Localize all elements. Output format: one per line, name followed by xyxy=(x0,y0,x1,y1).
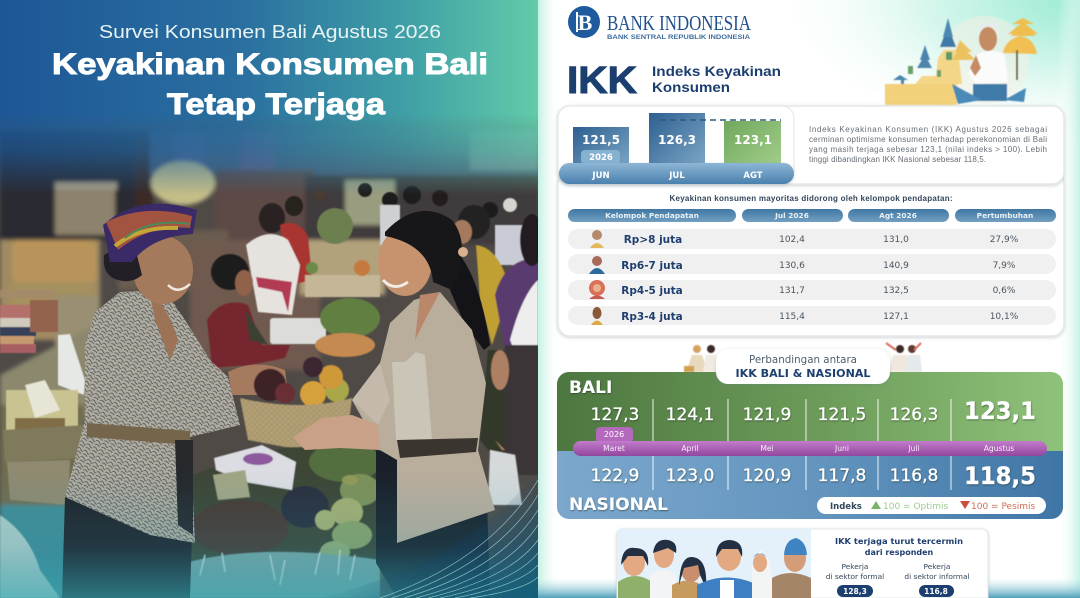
dividers xyxy=(653,399,951,490)
month pill xyxy=(559,163,794,184)
bottom-right corner overlay xyxy=(341,489,538,598)
text block: IKK description: tinggi dibandingkan IKK Nasional sebesar 118,5. xyxy=(809,155,986,164)
comparison title pill xyxy=(716,349,890,384)
national values: 123,0 xyxy=(666,466,714,486)
illustration: respondents xyxy=(617,529,811,598)
woman with headscarf xyxy=(62,204,287,598)
top gradient overlay xyxy=(0,0,538,195)
IKK heading: Indeks Keyakinan xyxy=(652,64,781,79)
bar: Juni: 2026 xyxy=(589,153,613,163)
panel: income table card xyxy=(558,172,1064,336)
panel: respondent card xyxy=(617,529,988,598)
panel: IKK summary card xyxy=(558,106,1064,184)
Bank Indonesia logo: B xyxy=(578,10,593,35)
table row: Rp6-7 juta: 130,6 xyxy=(779,261,805,271)
table header: Kelompok Pendapatan xyxy=(605,211,699,220)
month bar xyxy=(573,441,1047,456)
text block: IKK description: yang masih terjaga sebesar 123,1 (nilai indeks > 100). Lebih xyxy=(809,145,1047,154)
month bar: Agustus xyxy=(984,444,1014,453)
IKK heading xyxy=(567,60,781,102)
text block: IKK description: cerminan optimisme konsumen terhadap perekonomian di Bali xyxy=(809,135,1047,144)
table row: Rp3-4 juta: 10,1% xyxy=(990,312,1019,322)
month bar: April xyxy=(681,444,699,453)
table row: Rp>8 juta: 131,0 xyxy=(883,235,909,245)
panel: Bali vs national comparison xyxy=(557,372,1063,519)
table row: Rp4-5 juta: 132,5 xyxy=(883,286,909,296)
comparison title pill: Perbandingan antara xyxy=(749,354,857,366)
table row: Rp4-5 juta xyxy=(568,280,1056,300)
table row: Rp>8 juta: 102,4 xyxy=(779,235,805,245)
2026 tag: 2026 xyxy=(604,430,624,439)
bar: Juli xyxy=(649,113,705,170)
main title: Tetap Terjaga xyxy=(167,88,385,121)
Bali values: 126,3 xyxy=(890,405,938,425)
crowd heads xyxy=(382,192,398,208)
national values xyxy=(591,462,1036,490)
table row: Rp6-7 juta xyxy=(568,254,1056,274)
Bank Indonesia logo: BANK INDONESIA xyxy=(607,11,751,35)
market background xyxy=(0,130,540,598)
table header: Agt 2026 xyxy=(879,211,917,220)
vegetables and fruit stall xyxy=(0,442,381,598)
main title: Keyakinan Konsumen Bali xyxy=(52,48,488,81)
main title xyxy=(52,48,488,121)
respondent text: 116,8 xyxy=(924,587,948,596)
respondent text: dari responden xyxy=(865,548,934,557)
table header: Jul 2026 xyxy=(774,211,809,220)
Bali values: 127,3 xyxy=(591,405,639,425)
table header xyxy=(568,209,1056,222)
Bank Indonesia logo xyxy=(568,6,751,41)
month bar: Mei xyxy=(760,444,774,453)
table row: Rp4-5 juta: 0,6% xyxy=(993,286,1016,296)
national values: 122,9 xyxy=(591,466,639,486)
month bar: Maret xyxy=(603,444,625,453)
respondent text: 128,3 xyxy=(843,587,867,596)
national values: 120,9 xyxy=(743,466,791,486)
bar: Juni: 121,5 xyxy=(582,133,620,147)
table row: Rp3-4 juta: Rp3-4 juta xyxy=(621,311,683,323)
respondent text: IKK terjaga turut tercermin xyxy=(835,537,963,546)
background shoppers xyxy=(207,183,544,505)
respondent text: di sektor formal xyxy=(826,572,884,581)
smiling young woman xyxy=(293,211,495,598)
table row: Rp3-4 juta xyxy=(568,306,1056,325)
national values: 117,8 xyxy=(818,466,866,486)
table header: Pertumbuhan xyxy=(977,211,1033,220)
bar: Agustus xyxy=(724,121,781,170)
month pill: JUL xyxy=(668,171,685,181)
2026 tag xyxy=(596,427,633,443)
icon: Balinese man and temple xyxy=(885,16,1038,105)
table heading: Keyakinan konsumen mayoritas didorong oleh kelompok pendapatan: xyxy=(670,194,952,203)
icon: students left xyxy=(684,345,716,372)
market photo panel xyxy=(0,0,544,598)
Bali values: 124,1 xyxy=(666,405,714,425)
month bar: Juli xyxy=(907,444,920,453)
table row: Rp6-7 juta: 7,9% xyxy=(993,261,1016,271)
table row: Rp6-7 juta: 140,9 xyxy=(883,261,909,271)
table row: Rp4-5 juta: Rp4-5 juta xyxy=(621,285,683,297)
label: Bali: BALI xyxy=(569,378,612,398)
legend: Indeks xyxy=(830,502,862,512)
bar: Juni xyxy=(573,127,629,170)
text block: IKK description xyxy=(809,125,1047,164)
legend: 100 = Pesimis xyxy=(971,502,1036,512)
fabric pile xyxy=(0,290,85,505)
national values: 116,8 xyxy=(890,466,938,486)
panel: monthly bar chart xyxy=(558,106,794,184)
respondent text: Pekerja xyxy=(842,562,868,571)
IKK heading: Konsumen xyxy=(652,80,730,95)
table row: Rp>8 juta xyxy=(568,229,1056,249)
national values: 118,5 xyxy=(964,462,1036,490)
Bank Indonesia logo: BANK SENTRAL REPUBLIK INDONESIA xyxy=(607,34,750,41)
bar: Juli: 126,3 xyxy=(658,133,696,147)
month pill: JUN xyxy=(591,171,610,181)
text block: IKK description: Indeks Keyakinan Konsumen (IKK) Agustus 2026 sebagai xyxy=(809,125,1047,134)
IKK heading: IKK xyxy=(567,60,638,102)
label: Nasional: NASIONAL xyxy=(569,495,668,515)
bar: Agustus: 123,1 xyxy=(734,133,772,147)
subtitle: Survei Konsumen Bali Agustus 2026 xyxy=(99,21,441,42)
Bali values: 121,5 xyxy=(818,405,866,425)
table row: Rp>8 juta: 27,9% xyxy=(990,235,1019,245)
legend xyxy=(817,497,1046,514)
comparison title pill: IKK BALI & NASIONAL xyxy=(736,368,871,380)
table row: Rp3-4 juta: 127,1 xyxy=(883,312,909,322)
month pill: AGT xyxy=(743,171,763,181)
respondent text xyxy=(826,537,970,597)
Bali values: 123,1 xyxy=(964,397,1036,425)
right panel background xyxy=(538,0,1080,598)
Bali values xyxy=(591,397,1036,425)
curved line motif xyxy=(380,480,538,598)
respondent text: di sektor informal xyxy=(904,572,970,581)
respondent text: Pekerja xyxy=(924,562,950,571)
legend: 100 = Optimis xyxy=(883,502,949,512)
bottom gradient overlay xyxy=(0,488,538,598)
table row: Rp3-4 juta: 115,4 xyxy=(779,312,805,322)
fruit basket xyxy=(240,357,352,447)
icon: students right xyxy=(886,343,922,372)
Bali values: 121,9 xyxy=(743,405,791,425)
table row: Rp4-5 juta: 131,7 xyxy=(779,286,805,296)
table row: Rp6-7 juta: Rp6-7 juta xyxy=(621,260,683,272)
month bar: Juni xyxy=(834,444,849,453)
table row: Rp>8 juta: Rp>8 juta xyxy=(624,234,682,246)
